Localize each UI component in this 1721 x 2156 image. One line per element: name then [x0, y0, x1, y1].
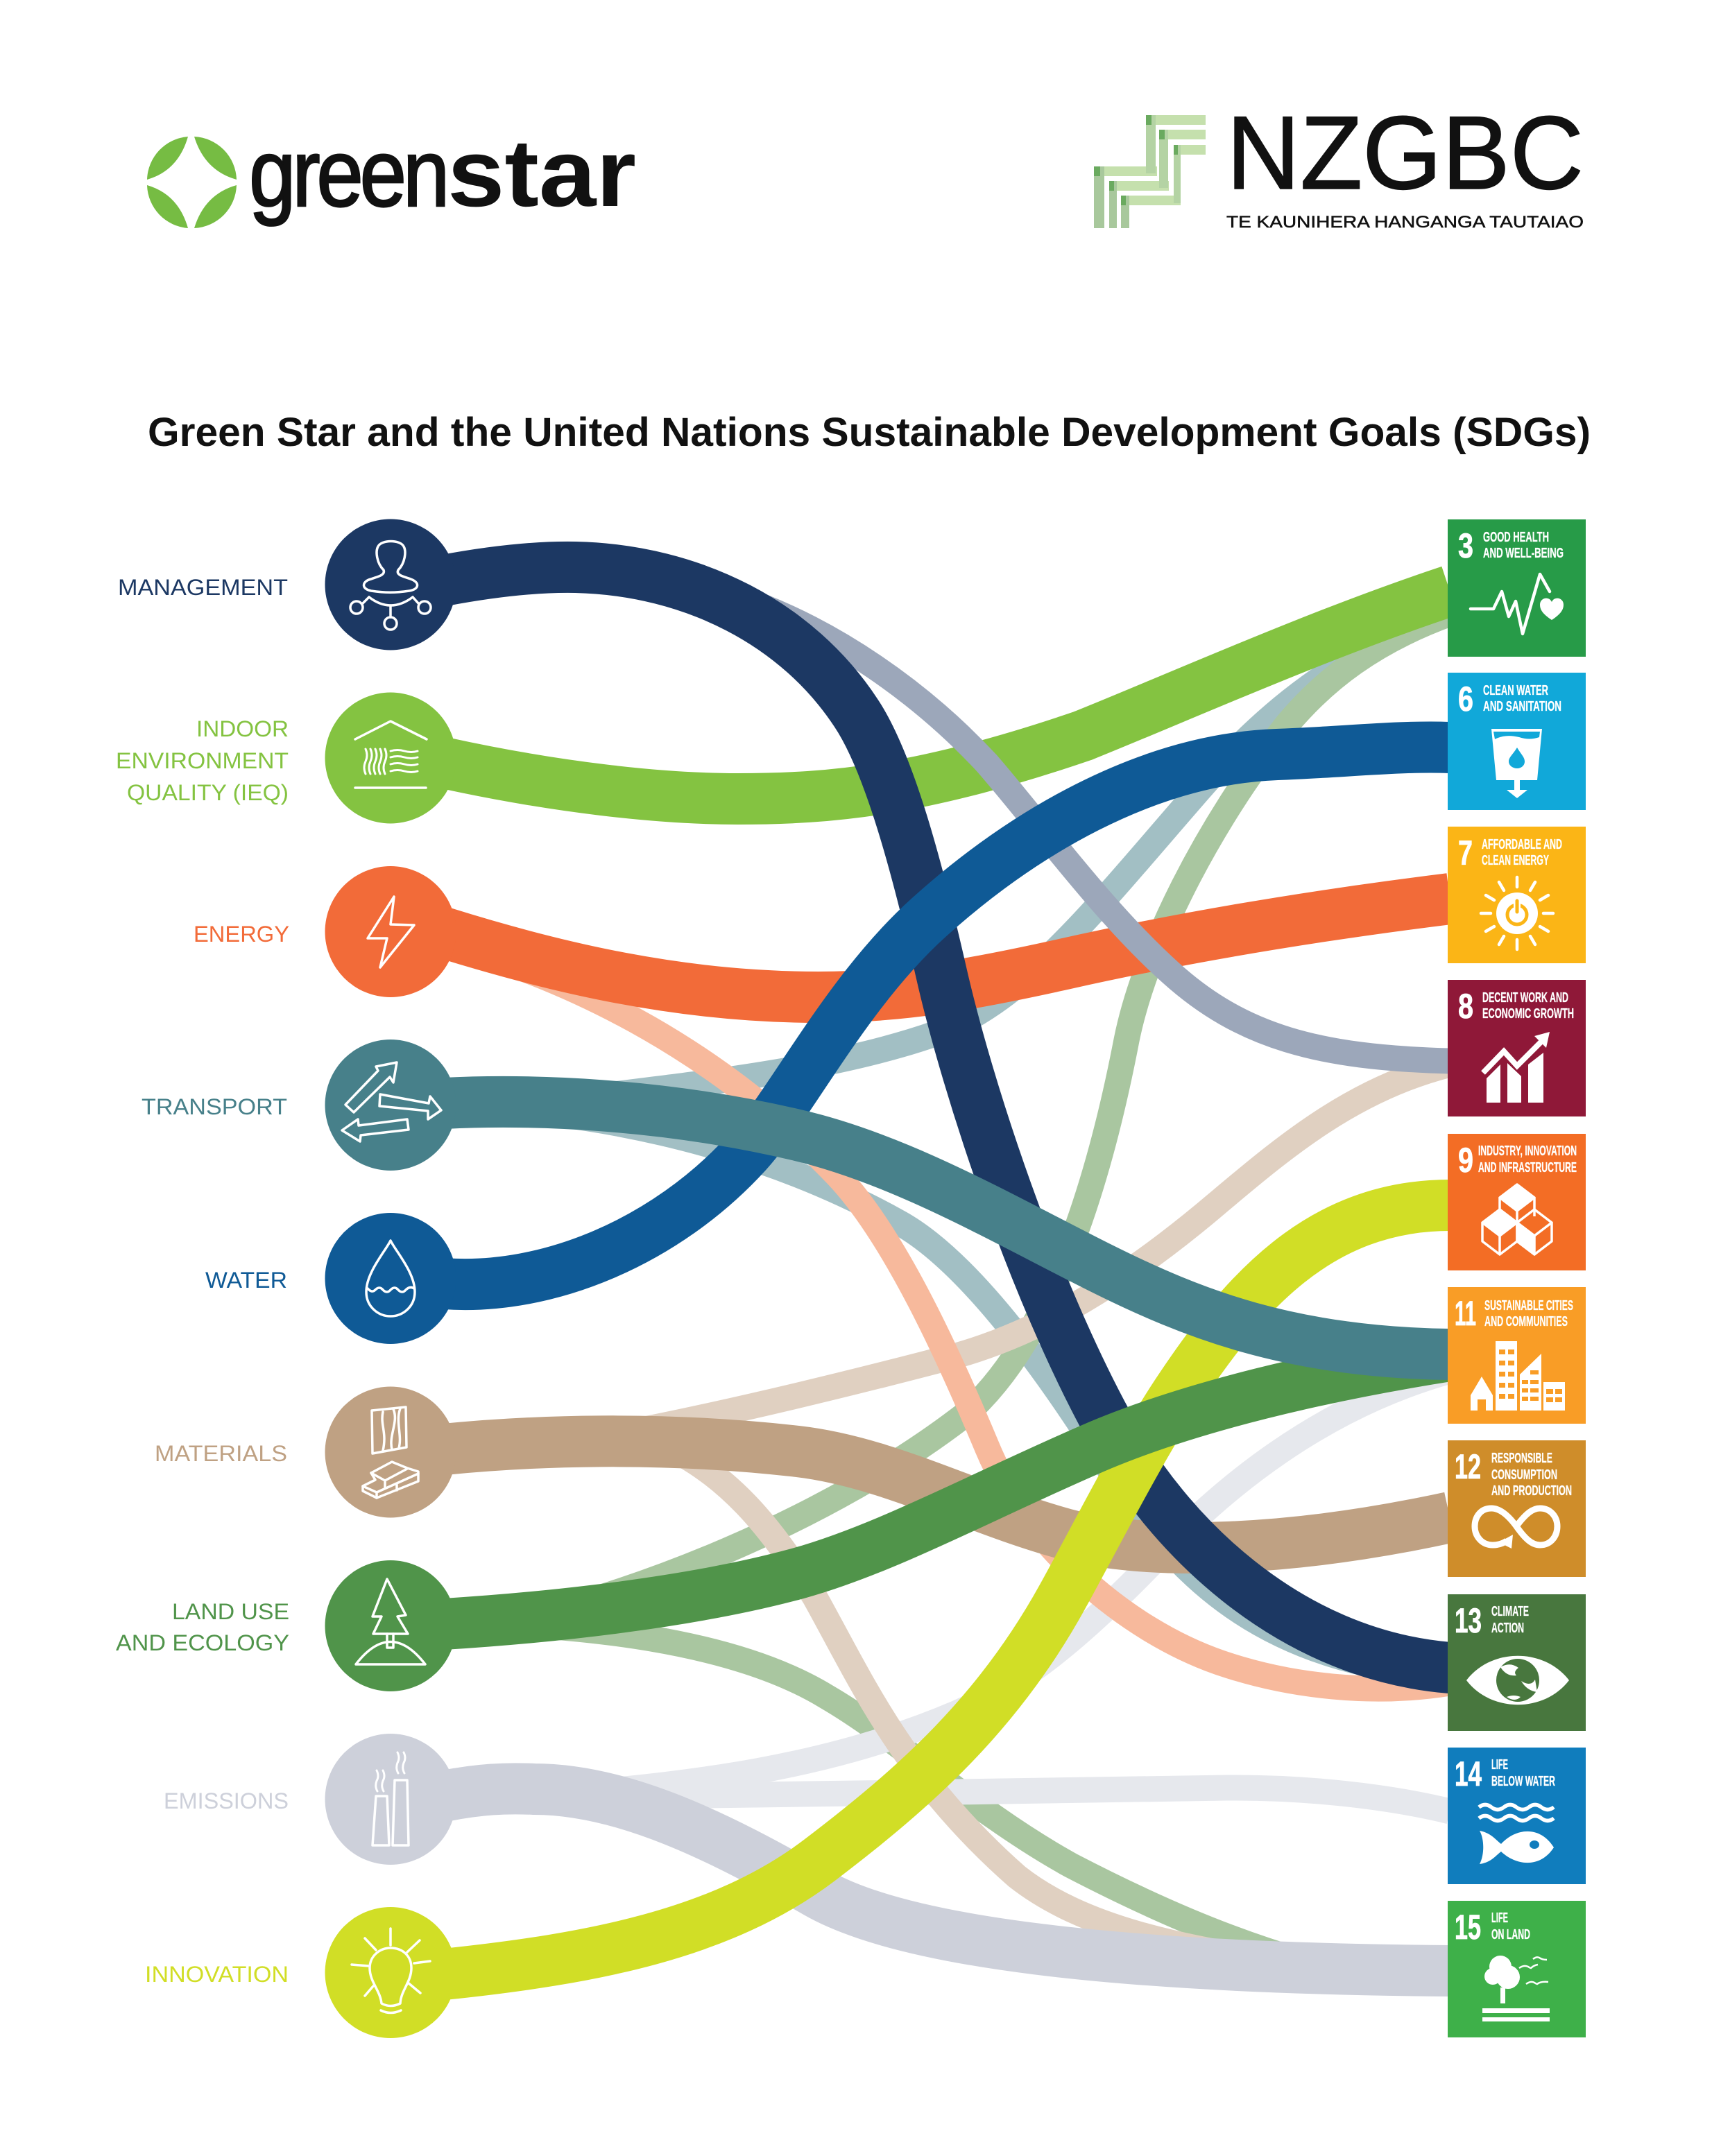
ribbon: Management to SDG 13 — [444, 567, 1450, 1668]
goal number 7: 7 — [1458, 834, 1473, 872]
icon circle: Land Use — [325, 1560, 456, 1691]
ribbon: Water to SDG 6 — [444, 747, 1450, 1284]
goal name — [1484, 1298, 1573, 1329]
tile: SDG 7 — [1448, 827, 1586, 963]
goal number 8: 8 — [1458, 987, 1473, 1026]
category: Emissions — [164, 1734, 456, 1865]
tile: SDG 8 — [1448, 980, 1586, 1116]
category: Management — [118, 519, 456, 650]
category: Innovation — [145, 1907, 456, 2038]
goal name: CONSUMPTION — [1491, 1467, 1557, 1483]
label: Transport: TRANSPORT — [142, 1094, 287, 1119]
goal name: AND SANITATION — [1483, 699, 1561, 714]
label: Emissions: EMISSIONS — [164, 1788, 289, 1813]
icon circle: Materials — [325, 1387, 456, 1517]
goal name: ACTION — [1491, 1621, 1524, 1636]
goal name: AND WELL-BEING — [1483, 546, 1564, 561]
goal number 9: 9 — [1458, 1141, 1473, 1180]
goal name: ECONOMIC GROWTH — [1482, 1006, 1574, 1021]
icon: lightning bolt — [368, 897, 414, 967]
goal name: CLEAN WATER — [1483, 683, 1548, 698]
label: Innovation: INNOVATION — [145, 1962, 289, 1987]
tile: SDG 6 — [1448, 673, 1586, 810]
wordmark: green: green — [249, 120, 446, 227]
title: Green Star and the United Nations Sustainable Development Goals (SDGs) — [148, 410, 1591, 455]
icon: sun with power symbol — [1481, 877, 1553, 949]
goal name — [1491, 1604, 1529, 1636]
goal name: INDUSTRY, INNOVATION — [1478, 1144, 1577, 1159]
logo: greenstar — [147, 120, 636, 228]
goal number 6: 6 — [1458, 680, 1473, 718]
icon circle: Emissions — [325, 1734, 456, 1865]
icon: timber and bricks — [363, 1407, 418, 1498]
ribbon: Materials to SDG 12 — [444, 1441, 1450, 1548]
goal name — [1483, 530, 1564, 561]
category: Water — [205, 1213, 456, 1344]
goal number 14: 14 — [1455, 1754, 1482, 1793]
goal name — [1482, 990, 1574, 1021]
goal name: AND INFRASTRUCTURE — [1478, 1160, 1577, 1175]
icon: light bulb — [352, 1929, 430, 2012]
label: Indoor Environment Quality (IEQ): QUALITY (IEQ) — [127, 780, 289, 805]
icon: waves and fish — [1479, 1804, 1554, 1864]
goal name: AFFORDABLE AND — [1482, 837, 1562, 852]
label: Land Use and Ecology — [116, 1599, 289, 1655]
goal name — [1491, 1451, 1572, 1499]
goal name: GOOD HEALTH — [1483, 530, 1549, 545]
goal name: LIFE — [1491, 1911, 1508, 1926]
goal name — [1482, 837, 1562, 868]
tile: SDG 3 — [1448, 519, 1586, 657]
icon circle: IEQ — [325, 692, 456, 824]
chart: ribbons linking Green Star categories to SDGs — [444, 567, 1450, 1974]
icon circle: Energy — [325, 866, 456, 997]
label: Indoor Environment Quality (IEQ): INDOOR — [196, 716, 289, 741]
icon: glass of water with arrow — [1491, 729, 1542, 798]
icon: chimneys with smoke — [373, 1752, 409, 1845]
goal name: ON LAND — [1491, 1927, 1530, 1942]
goal number 11: 11 — [1455, 1294, 1476, 1333]
goal name: LIFE — [1491, 1757, 1508, 1773]
icon: heartbeat and heart — [1471, 574, 1564, 634]
label: Energy: ENERGY — [194, 922, 289, 947]
wordmark: NZGBC: NZGBC — [1226, 94, 1584, 211]
ribbon: Innovation to SDG 9 — [444, 1205, 1450, 1974]
goal name: DECENT WORK AND — [1482, 990, 1568, 1006]
ribbon: Materials to SDG 8 — [555, 1064, 1450, 1446]
goal name: AND PRODUCTION — [1491, 1483, 1572, 1499]
icon: tree on hill — [356, 1579, 425, 1664]
ribbon: Energy to SDG 13 — [486, 956, 1450, 1689]
category: Energy — [194, 866, 456, 997]
icon circle: Water — [325, 1213, 456, 1344]
label: Materials: MATERIALS — [155, 1441, 287, 1466]
goal name — [1491, 1911, 1530, 1942]
label: Land Use and Ecology: LAND USE — [172, 1599, 289, 1624]
goal name — [1478, 1144, 1577, 1175]
goal name — [1491, 1757, 1555, 1789]
goal name: SUSTAINABLE CITIES — [1484, 1298, 1573, 1313]
ribbon: Energy to SDG 7 — [444, 899, 1450, 997]
ribbon: Transport to SDG 3 — [555, 614, 1450, 1102]
ribbon: Indoor Environment Quality to SDG 3 — [444, 591, 1450, 799]
icon circle: Innovation — [325, 1907, 456, 2038]
wordmark: star: star — [447, 120, 636, 227]
tile: SDG 14 — [1448, 1748, 1586, 1884]
icon: house with air and light — [355, 721, 427, 788]
ribbon: Land Use to SDG 11 — [444, 1356, 1450, 1624]
icon circle: Transport — [325, 1040, 456, 1171]
ribbon: Transport to SDG 13 — [555, 1114, 1450, 1675]
goal name: RESPONSIBLE — [1491, 1451, 1552, 1466]
icon: person with network — [350, 541, 431, 630]
icon: water drop — [366, 1241, 415, 1316]
tile: SDG 12 — [1448, 1440, 1586, 1577]
icon: tree, birds and ground — [1482, 1956, 1550, 2021]
label: Management: MANAGEMENT — [118, 575, 288, 600]
goal number 13: 13 — [1455, 1601, 1482, 1640]
tile: SDG 15 — [1448, 1901, 1586, 2037]
icon: stacked cubes — [1482, 1184, 1552, 1254]
ribbon: Emissions to SDG 11 — [555, 1371, 1450, 1796]
icon: infinity loop with arrow — [1475, 1508, 1557, 1549]
goal number 15: 15 — [1455, 1908, 1481, 1947]
ribbon: Emissions to SDG 14 — [555, 1788, 1450, 1811]
goal name: BELOW WATER — [1491, 1774, 1555, 1789]
ribbon: Land Use to SDG 15 — [486, 1623, 1318, 1966]
category: Land Use and Ecology — [116, 1560, 456, 1691]
ribbon: Emissions to SDG 15 — [444, 1788, 1450, 1971]
icon: rising bar chart — [1483, 1032, 1550, 1103]
tile: SDG 13 — [1448, 1594, 1586, 1731]
goal name: AND COMMUNITIES — [1484, 1314, 1568, 1329]
ribbon: Materials to SDG 15 — [659, 1442, 1304, 1966]
goal number 3: 3 — [1458, 526, 1473, 565]
icon: NZGBC stair mark — [1094, 115, 1206, 228]
ribbon: Transport to SDG 11 — [444, 1102, 1450, 1354]
category: Transport — [142, 1040, 456, 1171]
label: Water: WATER — [205, 1268, 287, 1293]
tile: SDG 9 — [1448, 1134, 1586, 1270]
tile: SDG 11 — [1448, 1287, 1586, 1424]
label: Indoor Environment Quality (IEQ): ENVIRONMENT — [116, 748, 289, 773]
icon: eye with globe — [1466, 1656, 1569, 1705]
ribbon: Land Use to SDG 3 — [486, 614, 1450, 1626]
icon: three arrows — [342, 1062, 441, 1141]
goal number 12: 12 — [1455, 1447, 1481, 1486]
category: Materials — [155, 1387, 456, 1517]
goal name — [1483, 683, 1561, 714]
category: Indoor Environment Quality — [116, 692, 456, 824]
logo: NZGBC — [1094, 94, 1584, 232]
tagline: TE KAUNIHERA HANGANGA TAUTAIAO — [1226, 213, 1584, 232]
label: Land Use and Ecology: AND ECOLOGY — [116, 1630, 289, 1655]
icon: greenstar four-petal mark — [147, 137, 237, 228]
label: Indoor Environment Quality (IEQ) — [116, 716, 289, 805]
ribbon: Management to SDG 8 — [763, 607, 1450, 1061]
goal name: CLIMATE — [1491, 1604, 1529, 1619]
goal name: CLEAN ENERGY — [1482, 853, 1549, 868]
icon circle: Management — [325, 519, 456, 650]
icon: city buildings — [1471, 1341, 1565, 1411]
